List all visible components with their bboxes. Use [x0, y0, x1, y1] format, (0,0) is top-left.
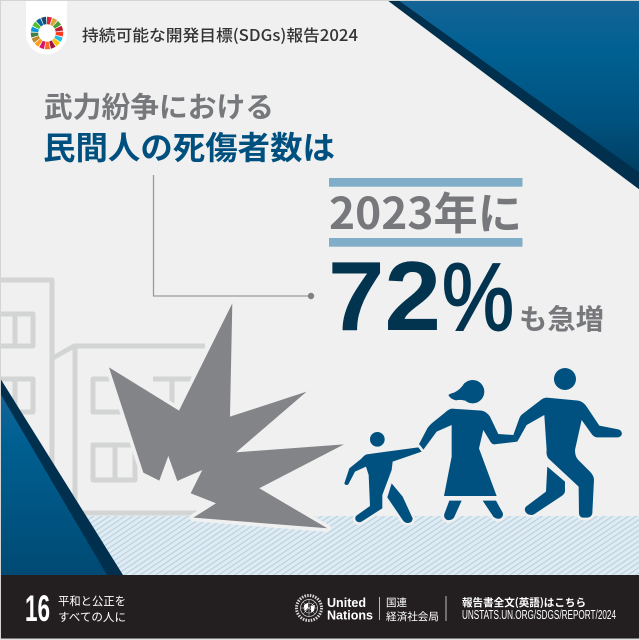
UN wordmark: United — [327, 595, 366, 610]
year callout: 2023年に — [329, 178, 522, 242]
heading line 1: 武力紛争における — [44, 85, 274, 126]
bottom left triangle — [0, 378, 123, 575]
icon: UN emblem — [296, 596, 322, 620]
top right triangle — [387, 0, 640, 190]
ground hatched — [0, 516, 640, 575]
figure: child — [344, 432, 422, 523]
big percentage — [328, 241, 514, 351]
UN wordmark: Nations — [327, 608, 373, 622]
UN department — [386, 595, 439, 624]
explosion — [109, 303, 344, 528]
report link — [462, 595, 616, 622]
big percentage: 72 — [328, 241, 441, 351]
figure: woman — [417, 380, 517, 520]
divider — [379, 597, 380, 620]
UN wordmark — [327, 595, 373, 622]
goal name: すべての人に — [58, 609, 126, 625]
icon: SDG colour wheel — [29, 15, 65, 51]
UN department: 経済社会局 — [386, 609, 439, 624]
buildings outline — [0, 280, 205, 513]
report link: 報告書全文(英語)はこちら — [462, 595, 586, 610]
big percentage: % — [442, 244, 514, 351]
goal number: 16 — [25, 588, 50, 629]
figure: man — [513, 368, 622, 518]
header badge with SDG wheel — [26, 0, 67, 54]
goal name: 平和と公正を — [58, 593, 126, 609]
suffix text: も急増 — [519, 298, 604, 338]
heading line 2: 民間人の死傷者数は — [43, 123, 335, 169]
goal name — [58, 593, 126, 625]
UN department: 国連 — [386, 595, 407, 610]
connector line — [154, 175, 314, 299]
header title: 持続可能な開発目標(SDGs)報告2024 — [82, 22, 358, 46]
divider — [446, 596, 447, 621]
footer bar — [0, 575, 640, 639]
family figures — [344, 368, 622, 523]
